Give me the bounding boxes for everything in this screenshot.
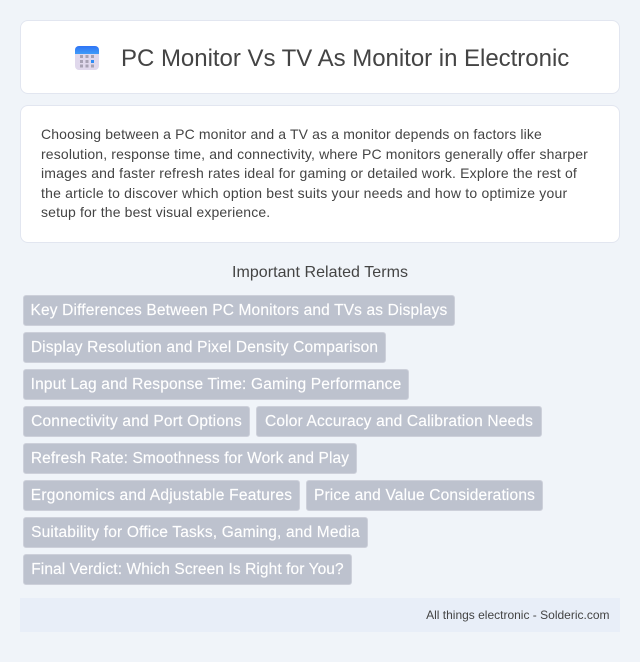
tag group: [23, 295, 543, 585]
icon: calendar: [75, 46, 99, 70]
tag: Final Verdict: Which Screen Is Right for You?: [31, 561, 344, 578]
tag: Display Resolution and Pixel Density Comparison: [31, 339, 378, 356]
footer bar: [20, 598, 620, 632]
tag: [23, 332, 386, 363]
tag: Connectivity and Port Options: [31, 413, 242, 430]
tag: Price and Value Considerations: [314, 487, 535, 504]
tag: [306, 480, 543, 511]
title: PC Monitor Vs TV As Monitor in Electronic: [121, 45, 569, 72]
tag: [23, 369, 409, 400]
header card: [20, 20, 620, 94]
intro text: the article to discover which option best suits your needs and how to optimize your: [41, 185, 567, 201]
tag: Key Differences Between PC Monitors and TVs as Displays: [31, 302, 447, 319]
tag: [23, 554, 352, 585]
tag: Suitability for Office Tasks, Gaming, and Media: [31, 524, 360, 541]
tag: [23, 517, 368, 548]
intro text: resolution, response time, and connectivity, where PC monitors generally offer sharper: [41, 146, 588, 162]
intro text: [41, 126, 588, 220]
tag: Input Lag and Response Time: Gaming Performance: [31, 376, 401, 393]
tag: Refresh Rate: Smoothness for Work and Play: [31, 450, 349, 467]
intro text: Choosing between a PC monitor and a TV as a monitor depends on factors like: [41, 126, 542, 142]
tag: [256, 406, 542, 437]
tag: Ergonomics and Adjustable Features: [31, 487, 292, 504]
footer text: All things electronic - Solderic.com: [426, 608, 610, 622]
heading: related terms: Important Related Terms: [232, 264, 408, 281]
intro text: setup for the best visual experience.: [41, 204, 270, 220]
panel: intro paragraph: [20, 105, 620, 243]
tag: Color Accuracy and Calibration Needs: [265, 413, 533, 430]
tag: [23, 406, 250, 437]
tag: [23, 295, 455, 326]
intro text: images and faster refresh rates ideal for gaming or detailed work. Explore the rest of: [41, 165, 577, 181]
tag: [23, 443, 357, 474]
tag: [23, 480, 300, 511]
